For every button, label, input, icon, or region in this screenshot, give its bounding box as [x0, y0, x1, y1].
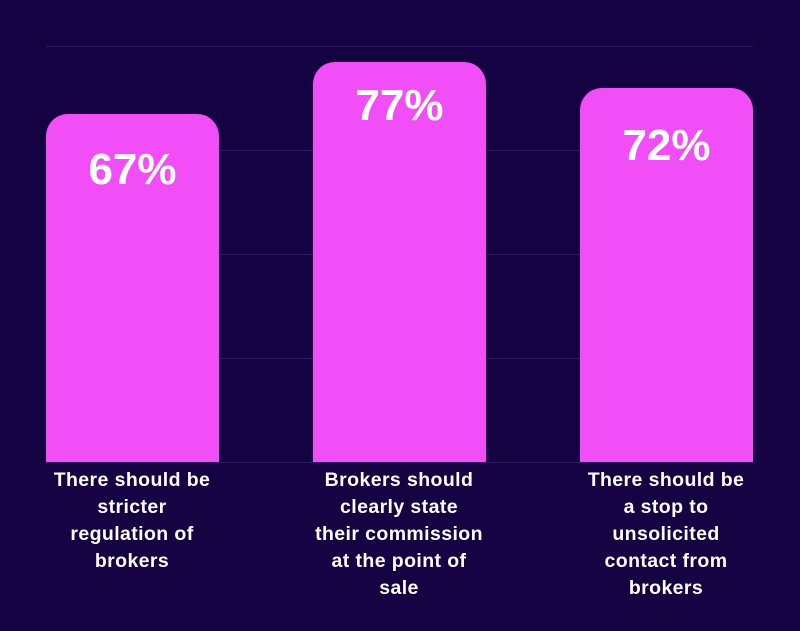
label 3: a stop to	[624, 496, 708, 518]
bar: stricter regulation	[46, 114, 219, 462]
label 2	[315, 469, 483, 599]
label 3: contact from	[605, 550, 727, 572]
label 3: There should be	[588, 469, 744, 491]
label 3: brokers	[629, 577, 703, 599]
bar: commission	[313, 62, 486, 462]
label 1: regulation of	[70, 523, 194, 545]
label 2: Brokers should	[325, 469, 473, 491]
label 1: brokers	[95, 550, 169, 572]
label 2: sale	[379, 577, 419, 599]
value 67%: 67%	[88, 145, 177, 194]
bar: unsolicited contact	[580, 88, 753, 462]
label 1	[54, 469, 210, 572]
label 2: their commission	[315, 523, 483, 545]
label 2: clearly state	[340, 496, 458, 518]
value 77%: 77%	[355, 81, 444, 130]
label 1: There should be	[54, 469, 210, 491]
label 3: unsolicited	[612, 523, 720, 545]
label 1: stricter	[97, 496, 167, 518]
label 2: at the point of	[332, 550, 466, 572]
value 72%: 72%	[622, 121, 711, 170]
label 3	[588, 469, 744, 599]
